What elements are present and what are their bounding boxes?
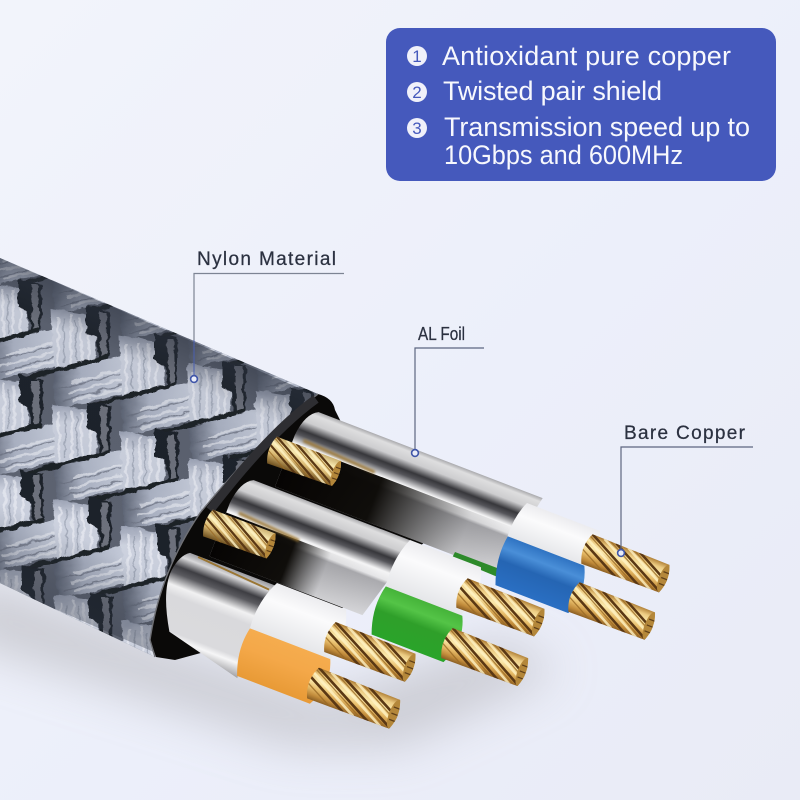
- white insulated wire: [507, 501, 604, 570]
- foil shield: top pair: [275, 407, 543, 578]
- green insulated wire: [366, 586, 468, 665]
- copper conductor: upper orange pair: [287, 608, 445, 694]
- green pair: [366, 537, 573, 697]
- copper conductor: upper blue pair: [546, 521, 698, 604]
- callout: AL Foil: [412, 324, 484, 456]
- orange pair: [231, 580, 445, 741]
- icon: number 1: 1: [412, 47, 422, 66]
- callout: Nylon Material: Nylon Material: [197, 249, 336, 270]
- inner copper strand 1: [237, 426, 365, 495]
- green sliver behind blue wire: [452, 552, 505, 578]
- copper conductor: lower green pair: [406, 615, 556, 697]
- orange insulated wire: [231, 628, 335, 707]
- icon: number 3: [407, 118, 427, 138]
- callout: AL Foil: AL Foil: [418, 324, 465, 344]
- cable drop shadow: [0, 570, 560, 745]
- icon: number 3: 3: [412, 119, 422, 138]
- callout: Bare Copper: [618, 423, 753, 556]
- copper conductor: lower blue pair: [533, 569, 683, 651]
- copper conductor: upper green pair: [421, 565, 573, 648]
- feature text 1: Antioxidant pure copper: [442, 41, 731, 71]
- feature text 2: Twisted pair shield: [443, 76, 662, 106]
- icon: number 2: 2: [412, 83, 422, 102]
- icon: number 2: [407, 82, 427, 102]
- panel: features: [386, 28, 776, 181]
- inner copper strand 2: [174, 499, 299, 568]
- callout: Nylon Material: [191, 249, 344, 382]
- callout: Bare Copper: Bare Copper: [624, 423, 746, 444]
- feature text 3, second line: 10Gbps and 600MHz: [444, 140, 683, 170]
- white insulated wire: [385, 537, 486, 618]
- foil shield: middle pair: [209, 475, 412, 622]
- blue pair: [489, 501, 698, 651]
- copper conductor: lower orange pair: [269, 653, 430, 741]
- white insulated wire: [249, 580, 352, 661]
- blue insulated wire: [489, 536, 590, 615]
- icon: number 1: [407, 46, 427, 66]
- braided nylon cable jacket: [0, 258, 318, 657]
- feature text 3: Transmission speed up to: [444, 112, 750, 142]
- cable end rim and dark interior: [150, 394, 440, 660]
- foil shield: front pair: [144, 549, 277, 680]
